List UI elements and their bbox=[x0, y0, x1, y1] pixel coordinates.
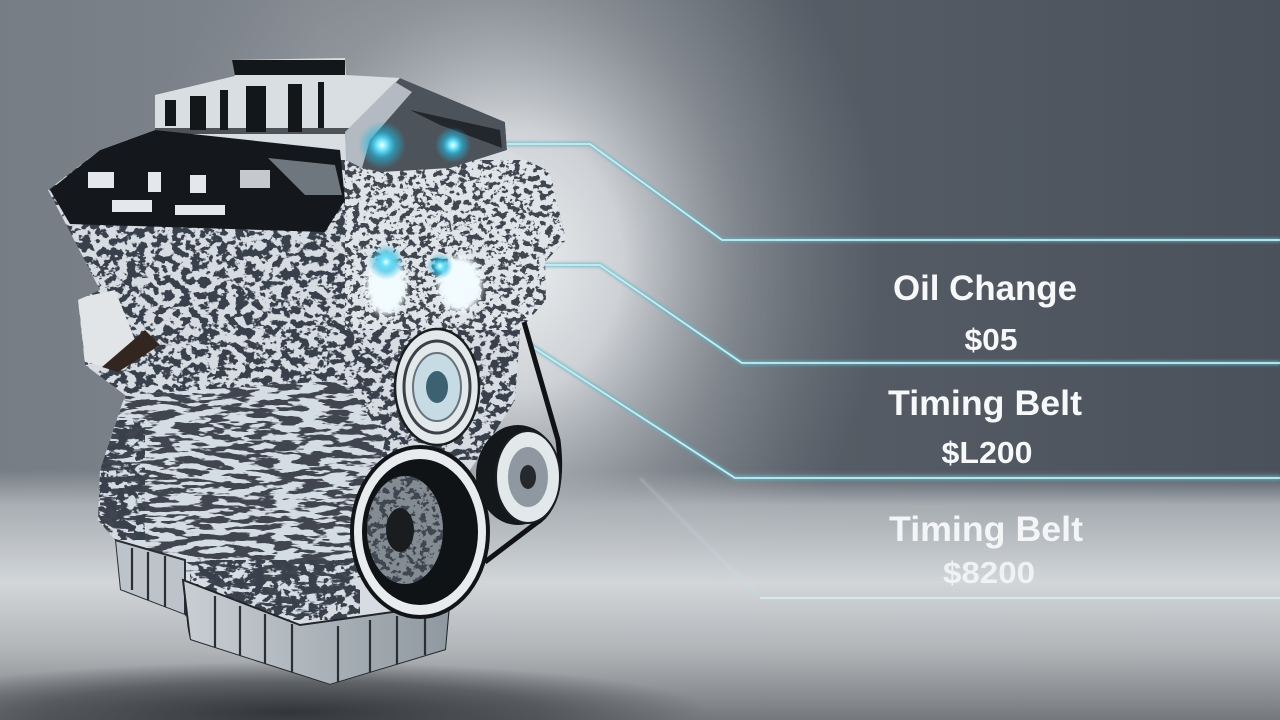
label: timing belt one: Timing Belt bbox=[888, 384, 1082, 423]
speckled right shoulder bbox=[345, 160, 570, 330]
lower edge speckle bbox=[95, 420, 145, 540]
speckled mid section bbox=[40, 160, 570, 460]
label: timing belt two bbox=[889, 510, 1083, 590]
callout lines bbox=[505, 144, 1280, 598]
lower block ribs bbox=[90, 375, 390, 625]
label: timing belt one: $L200 bbox=[942, 435, 1032, 470]
oil pans bbox=[115, 540, 185, 615]
label: timing belt two: $8200 bbox=[943, 555, 1035, 590]
label: oil change bbox=[893, 269, 1077, 357]
line: oil change callout bbox=[530, 265, 1280, 363]
line: lower callout bbox=[545, 478, 1280, 598]
drive belt bbox=[485, 322, 560, 562]
labels bbox=[888, 269, 1083, 590]
label: timing belt two: Timing Belt bbox=[889, 510, 1083, 549]
line: timing belt callout bbox=[530, 345, 1280, 478]
pulley: upper bbox=[395, 329, 479, 445]
label: oil change: $05 bbox=[964, 322, 1018, 357]
pulley: large crank bbox=[352, 447, 488, 617]
intake manifold runners bbox=[156, 76, 235, 132]
air plenum bbox=[345, 78, 507, 172]
pulley: small right bbox=[476, 425, 560, 525]
engine illustration bbox=[40, 50, 580, 690]
label: oil change: Oil Change bbox=[893, 269, 1077, 308]
dark valve cover bbox=[50, 130, 345, 232]
line: top callout bbox=[505, 144, 1280, 240]
side bulge bbox=[78, 290, 135, 368]
glowing highlights bbox=[358, 121, 482, 315]
engine body bbox=[40, 50, 580, 690]
label: timing belt one bbox=[888, 384, 1082, 470]
